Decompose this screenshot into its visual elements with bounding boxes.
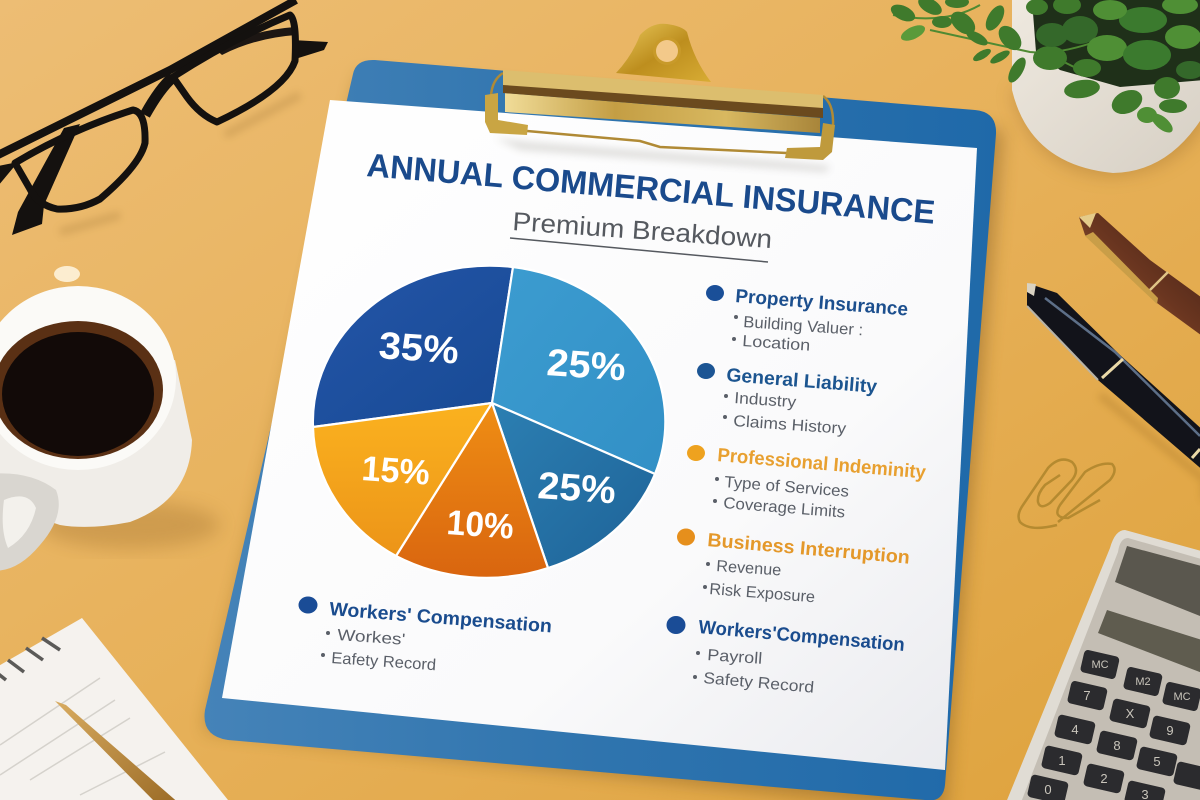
- clip plate: [505, 93, 820, 133]
- clip tab: [616, 24, 711, 82]
- icon: coffee cup: [0, 286, 220, 571]
- legend: professional indemnity: Professional Indeminity: [717, 445, 927, 484]
- legend: workers compensation right: [666, 616, 906, 697]
- clip top bar: [503, 70, 823, 108]
- legend: professional indemnity: Coverage Limits: [723, 495, 846, 522]
- legend: property insurance: Property Insurance: [735, 286, 909, 321]
- paper sheet: [222, 100, 977, 770]
- icon: calculator: [1005, 530, 1200, 800]
- clip frame wire: [491, 73, 833, 153]
- legend: general liability: General Liability: [726, 365, 878, 398]
- subtitle: Premium Breakdown: [512, 206, 773, 254]
- legend: workers compensation left: [298, 596, 553, 674]
- icon: brown pen: [1079, 213, 1200, 338]
- legend: business interruption: Revenue: [716, 558, 782, 580]
- panel: clipboard: [204, 24, 1003, 800]
- legend: business interruption: [677, 528, 911, 606]
- calculator key labels: X: [1126, 706, 1135, 721]
- clip left corner: [485, 93, 528, 135]
- icon: paper clips: [1019, 460, 1115, 528]
- calculator key labels: MC: [1173, 691, 1191, 703]
- legend: property insurance: Location: [742, 333, 811, 355]
- pie labels: 15%: [360, 449, 431, 493]
- icon: notebook and pencil: [0, 618, 232, 800]
- legend: business interruption: Business Interruption: [707, 530, 911, 569]
- legend: workers compensation left: Workes': [337, 627, 406, 649]
- legend: property insurance: [706, 285, 909, 355]
- pencil: [55, 701, 181, 800]
- icon: table reflection: [54, 266, 80, 282]
- legend: workers compensation left: Workers' Compensation: [329, 599, 553, 637]
- pie labels: [360, 325, 627, 547]
- calculator key labels: MC: [1091, 659, 1109, 671]
- calculator key labels: 0: [1044, 782, 1052, 797]
- legend: workers compensation right: Payroll: [707, 647, 763, 668]
- calculator key labels: M2: [1135, 676, 1151, 688]
- pie labels: 35%: [377, 325, 460, 373]
- pie labels: 10%: [445, 503, 515, 547]
- calculator keys: [1027, 649, 1200, 800]
- legend: general liability: Claims History: [733, 413, 847, 438]
- icon: gold clip: [485, 24, 835, 172]
- calculator key labels: 9: [1166, 723, 1174, 738]
- icon: black pen: [1027, 283, 1200, 500]
- title: ANNUAL COMMERCIAL INSURANCE: [365, 146, 937, 231]
- legend: property insurance: Building Valuer :: [743, 314, 864, 339]
- legend: professional indemnity: [687, 445, 927, 522]
- calculator key labels: 4: [1071, 722, 1079, 737]
- legend: general liability: Industry: [734, 390, 797, 411]
- pie labels: 25%: [536, 465, 617, 512]
- legend: business interruption: Risk Exposure: [709, 581, 816, 606]
- subtitle underline: [510, 238, 768, 262]
- calculator key labels: 5: [1153, 754, 1161, 769]
- legend: professional indemnity: Type of Services: [724, 474, 850, 501]
- calculator key labels: 2: [1100, 771, 1108, 786]
- calculator key labels: 1: [1058, 753, 1066, 768]
- calculator key labels: 7: [1083, 688, 1091, 703]
- clip right corner: [785, 123, 835, 160]
- notebook spiral: [0, 638, 60, 680]
- calculator key labels: [1044, 659, 1191, 800]
- legend: workers compensation right: Safety Record: [703, 670, 815, 697]
- legend: general liability: [697, 363, 878, 438]
- clip dark groove: [503, 84, 823, 118]
- icon: plant: [888, 0, 1200, 176]
- pie labels: 25%: [545, 342, 627, 389]
- pie chart: [313, 266, 665, 578]
- legend: workers compensation right: Workers'Compensation: [698, 617, 906, 656]
- legend: workers compensation left: Eafety Record: [331, 650, 437, 674]
- calculator key labels: 8: [1113, 738, 1121, 753]
- icon: glasses: [0, 0, 328, 235]
